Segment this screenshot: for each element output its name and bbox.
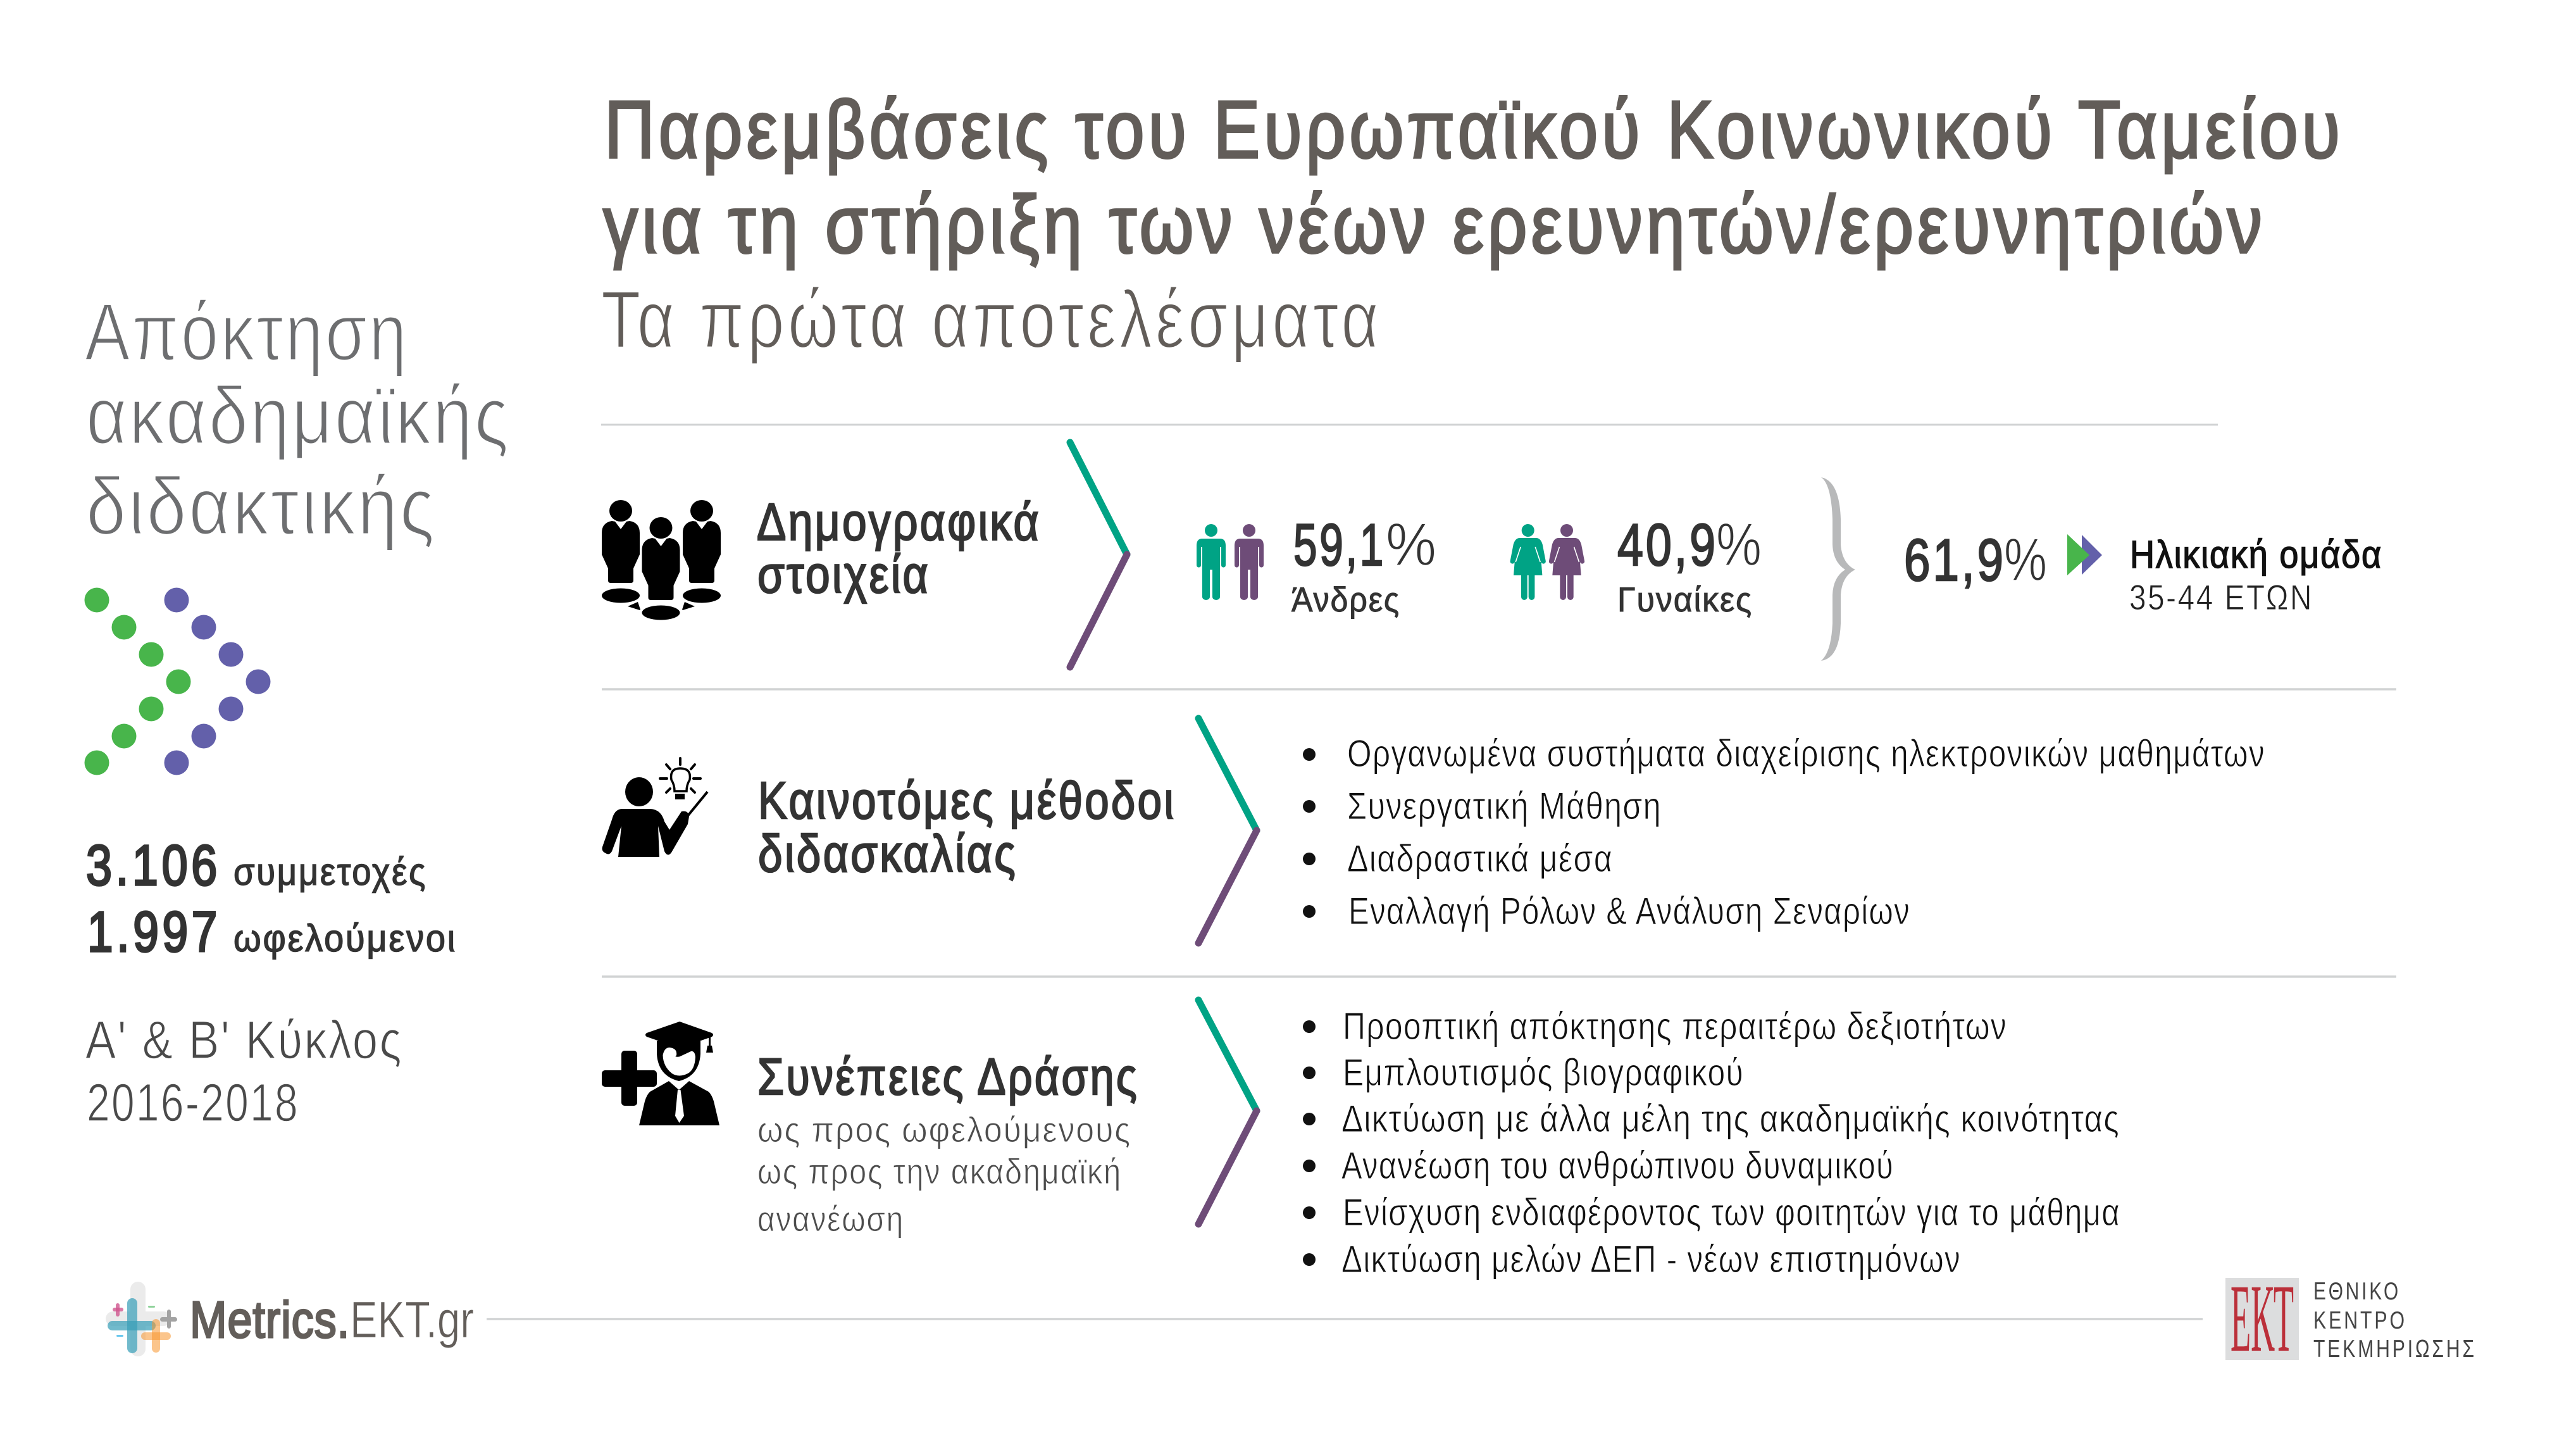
stat: men: 59,1 xyxy=(1293,511,1386,578)
heading: consequences of action: ως προς την ακαδημαϊκή xyxy=(757,1151,1122,1191)
stat: women: % xyxy=(1716,511,1762,579)
organisation name: ΚΕΝΤΡΟ xyxy=(2313,1307,2407,1334)
heading: innovative teaching methods: διδασκαλίας xyxy=(758,824,1017,883)
heading: demographics xyxy=(757,492,1041,604)
stat: age share: 61,9 xyxy=(1904,527,2006,593)
bullet list: methods: Οργανωμένα συστήματα διαχείρισης ηλεκτρονικών μαθημάτων xyxy=(1347,732,2265,775)
sidebar heading xyxy=(85,287,511,552)
stat: women xyxy=(1617,511,1762,619)
heading: innovative teaching methods: Καινοτόμες μέθοδοι xyxy=(758,771,1176,830)
sidebar heading: Απόκτηση xyxy=(85,287,409,378)
stat: men xyxy=(1291,511,1436,619)
organisation name: ΕΘΝΙΚΟ xyxy=(2313,1278,2401,1305)
bullet list: methods: Εναλλαγή Ρόλων & Ανάλυση Σεναρίων xyxy=(1348,890,1910,932)
bullet list: results: Ενίσχυση ενδιαφέροντος των φοιτητών για το μάθημα xyxy=(1343,1191,2120,1234)
heading: consequences of action xyxy=(757,1048,1139,1239)
sidebar heading: διδακτικής xyxy=(86,461,437,552)
stat: age share: % xyxy=(2004,526,2047,594)
title: Τα πρώτα αποτελέσματα xyxy=(601,275,1382,365)
title: για τη στήριξη των νέων ερευνητών/ερευνητριών xyxy=(603,179,2266,270)
organisation name xyxy=(2313,1278,2477,1363)
bullet list: methods: Συνεργατική Μάθηση xyxy=(1347,785,1662,827)
icon: group of people xyxy=(602,500,721,620)
logo: Metrics.EKT.gr: Metrics. xyxy=(190,1291,350,1349)
title: Παρεμβάσεις του Ευρωπαϊκού Κοινωνικού Ταμείου xyxy=(604,84,2344,175)
icon: graduate with plus xyxy=(602,1022,719,1125)
stat: men: Άνδρες xyxy=(1291,580,1400,619)
age group label: 35-44 ΕΤΩΝ xyxy=(2129,577,2313,617)
bullet list: results: Προοπτική απόκτησης περαιτέρω δεξιοτήτων xyxy=(1343,1005,2007,1048)
icon: men xyxy=(1197,524,1264,600)
sidebar period: 2016-2018 xyxy=(87,1073,299,1132)
icon: dotted double arrow xyxy=(85,587,271,775)
stat: women: 40,9 xyxy=(1617,511,1718,578)
icon: women xyxy=(1510,524,1584,600)
heading: consequences of action: ως προς ωφελούμενους xyxy=(757,1110,1131,1149)
bullet list: results: Δικτύωση με άλλα μέλη της ακαδημαϊκής κοινότητας xyxy=(1341,1098,2120,1140)
brace xyxy=(1821,477,1855,661)
bullet list: results: Δικτύωση μελών ΔΕΠ - νέων επιστημόνων xyxy=(1341,1238,1961,1280)
age group label xyxy=(2129,533,2382,617)
sidebar period: Α' & Β' Κύκλος xyxy=(85,1010,403,1070)
age group label: Ηλικιακή ομάδα xyxy=(2130,533,2382,576)
icon: teacher with lightbulb xyxy=(602,758,707,857)
sidebar statistics: 1.997 xyxy=(87,901,221,964)
text: ΕΚΤ xyxy=(2231,1265,2294,1372)
logo: Metrics.EKT.gr xyxy=(106,1282,474,1356)
heading: demographics: Δημογραφικά xyxy=(757,492,1041,551)
bullet list: results: Ανανέωση του ανθρώπινου δυναμικού xyxy=(1341,1144,1894,1187)
icon: double arrow xyxy=(2067,534,2102,575)
sidebar statistics: 3.106 xyxy=(86,834,221,898)
stat: men: % xyxy=(1386,511,1436,579)
arrow: chevron methods xyxy=(1198,718,1257,943)
arrow: chevron results xyxy=(1198,1000,1257,1224)
arrow: chevron demographics xyxy=(1070,442,1127,667)
bullet list: methods xyxy=(1303,732,2265,932)
sidebar statistics xyxy=(86,834,457,964)
bullet list: results: Εμπλουτισμός βιογραφικού xyxy=(1343,1051,1744,1094)
logo: EKT xyxy=(2225,1265,2299,1372)
title xyxy=(601,84,2344,365)
sidebar statistics: ωφελούμενοι xyxy=(233,917,457,960)
logo: Metrics.EKT.gr: EKT.gr xyxy=(350,1291,474,1349)
heading: consequences of action: Συνέπειες Δράσης xyxy=(757,1048,1139,1106)
heading: innovative teaching methods xyxy=(758,771,1176,883)
organisation name: ΤΕΚΜΗΡΙΩΣΗΣ xyxy=(2313,1336,2477,1363)
sidebar statistics: συμμετοχές xyxy=(233,851,427,893)
bullet list: methods: Διαδραστικά μέσα xyxy=(1347,837,1613,880)
heading: demographics: στοιχεία xyxy=(757,545,930,604)
sidebar heading: ακαδημαϊκής xyxy=(86,371,511,461)
bullet list: results xyxy=(1303,1005,2120,1280)
stat: women: Γυναίκες xyxy=(1617,580,1753,619)
heading: consequences of action: ανανέωση xyxy=(757,1199,904,1239)
sidebar period xyxy=(85,1010,403,1132)
